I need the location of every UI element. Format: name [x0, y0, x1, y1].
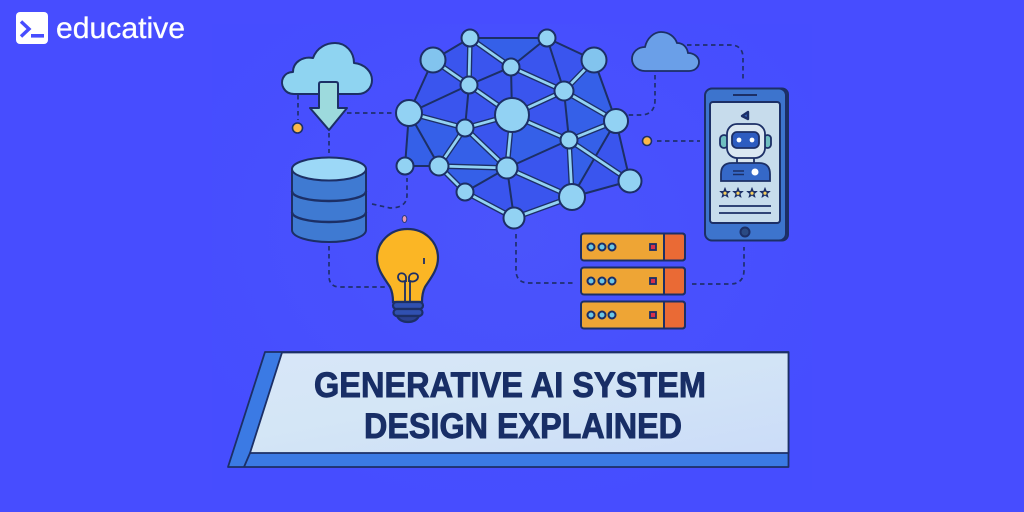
server 1 [581, 234, 685, 260]
robot [720, 112, 771, 181]
banner shape [228, 352, 788, 467]
icon: terminal prompt [16, 12, 48, 44]
chart: neural network [396, 30, 642, 228]
icon: download cloud [282, 43, 372, 130]
phone body [705, 88, 788, 240]
nodes [396, 30, 642, 228]
title banner [228, 352, 788, 467]
wordmark: educative [56, 12, 185, 45]
icon: small cloud [632, 32, 699, 71]
title: GENERATIVE AI SYSTEM [314, 366, 706, 405]
thin links [405, 38, 630, 218]
rating stars [720, 188, 770, 197]
logo: educative [16, 12, 185, 45]
network background facets [405, 38, 630, 218]
icon: smartphone with robot [705, 88, 788, 240]
icon: yellow node dot [642, 136, 652, 146]
title: DESIGN EXPLAINED [364, 407, 682, 446]
connectors: dashed lines [298, 45, 744, 287]
icon: database [292, 158, 366, 242]
icon: pink spark [402, 216, 407, 222]
server 3 [581, 302, 685, 328]
thick link outlines [409, 38, 630, 218]
icon: server stack [581, 234, 685, 328]
icon: light bulb [377, 229, 438, 322]
icon: yellow node dot [292, 123, 302, 133]
thick link highlights [409, 38, 630, 218]
text lines [719, 206, 771, 213]
server 2 [581, 268, 685, 294]
